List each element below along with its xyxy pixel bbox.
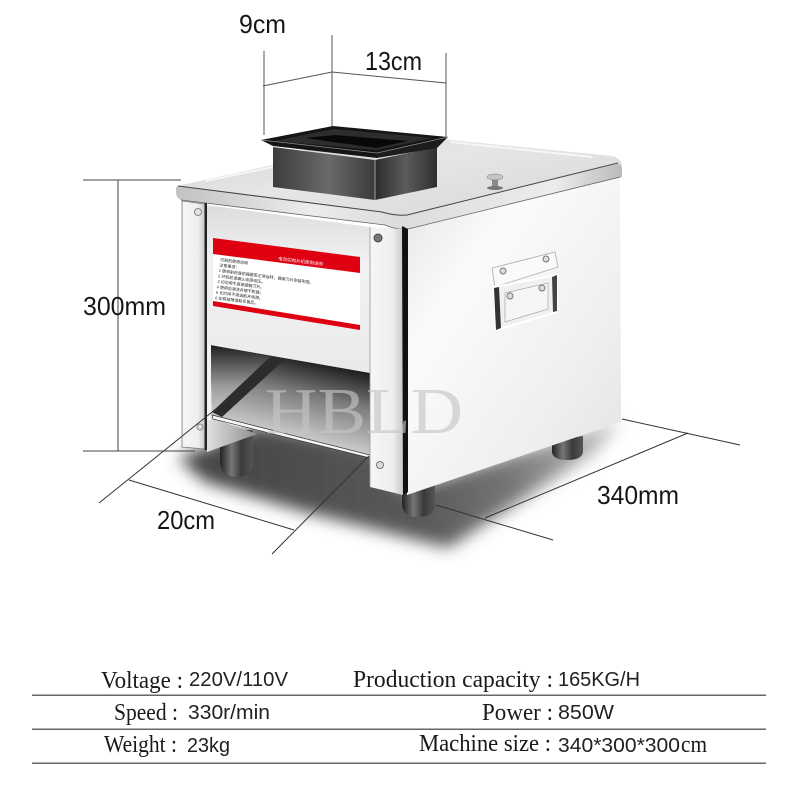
lid knob: [487, 174, 503, 190]
label body text: 6 如有故障请联系售后。: [215, 294, 259, 306]
hopper inner wall: [275, 129, 433, 150]
label header text: 电动切肉片机使用说明: [278, 255, 324, 268]
dimension label: 20cm: 20cm: [157, 505, 215, 535]
front centre panel: [206, 205, 370, 373]
dark corner edge: [402, 226, 408, 495]
dimension label: 13cm: 13cm: [365, 46, 422, 76]
hopper front face: [273, 147, 375, 200]
label body text: 1 使用前检查机器是否正常运转，确保刀片安装牢固。: [218, 267, 314, 285]
row 1 left: voltage: [101, 668, 288, 694]
diagonal blade stripe: [212, 357, 284, 417]
watermark: HBLD: [265, 375, 463, 448]
row 2 left: speed: 330r/min: [188, 701, 270, 724]
row 3 right: machine size: [419, 731, 707, 758]
row 3 right: machine size: 340*300*300: [558, 734, 680, 757]
row 2 left: speed: [114, 700, 270, 726]
dimension label: 9cm: 9cm: [239, 9, 286, 39]
right side panel: [403, 176, 621, 495]
label body text: 5 长时间不用请断开电源。: [216, 289, 263, 301]
dimension lines: hopper: [263, 35, 446, 137]
lid rim: [176, 164, 622, 229]
row 1 right: production capacity: 165KG/H: [558, 668, 640, 691]
top lid surface: [177, 130, 622, 217]
row 3 left: weight: Weight :: [104, 732, 177, 758]
foot: right rear: [552, 436, 583, 460]
label body text: 3 切勿用手直接接触刀片。: [217, 278, 265, 290]
row 2 right: power: 850W: [558, 701, 615, 724]
hopper rim: [261, 126, 448, 158]
row 1 right: production capacity: Production capacity :: [353, 667, 553, 693]
dimension lines: depth: [436, 419, 740, 540]
lid rim bottom line: [181, 177, 620, 229]
opening left triangle: [210, 345, 272, 412]
right front post: [370, 227, 403, 495]
row 2 left: speed: Speed :: [114, 700, 178, 726]
dimension label: 300mm: 300mm: [83, 291, 166, 321]
label body text: 2 开机前请确认电源电压。: [218, 272, 265, 284]
hopper inner floor: [305, 135, 408, 148]
label red footer: [213, 301, 360, 330]
screw: top right: [374, 234, 382, 242]
label red header: [213, 238, 360, 273]
row 2 right: power: Power :: [482, 700, 553, 726]
table rules: [32, 694, 766, 764]
row 3 right: machine size: cm: [681, 732, 707, 758]
dimension lines: front width: [99, 400, 369, 554]
screw: top left: [194, 208, 202, 216]
warning label: [213, 238, 360, 330]
label body text: 注意事项：: [219, 261, 240, 270]
lower front plate: [207, 345, 257, 452]
feed hopper: [261, 126, 448, 200]
ground shadow: [178, 420, 622, 548]
dimension label: 340mm: 340mm: [597, 480, 679, 510]
row 1 left: voltage: 220V/110V: [189, 668, 288, 691]
side handle: [492, 252, 558, 330]
hopper side face: [375, 147, 437, 200]
screw: bottom right: [376, 462, 384, 468]
left post: [182, 201, 205, 449]
row 2 right: power: [482, 700, 615, 726]
machine: [176, 126, 622, 517]
row 1 left: voltage: Voltage :: [101, 668, 183, 694]
foot: front: [402, 485, 435, 517]
row 3 right: machine size: Machine size :: [419, 731, 551, 757]
blade edge: [212, 415, 370, 458]
label body text: [215, 256, 315, 312]
lid rim top line: [178, 163, 618, 215]
specification table: [32, 667, 766, 764]
cutting opening: [210, 345, 370, 455]
dimension lines: height: [83, 180, 195, 451]
foot: left rear: [220, 430, 253, 477]
label body text: 4 使用后清洗并擦干机器。: [216, 283, 264, 295]
label body text: 切割机使用说明: [220, 256, 248, 266]
screw: bottom left: [197, 424, 203, 430]
row 3 left: weight: [104, 732, 230, 758]
row 3 left: weight: 23kg: [187, 734, 230, 757]
lid inner edge highlight: [206, 142, 592, 181]
